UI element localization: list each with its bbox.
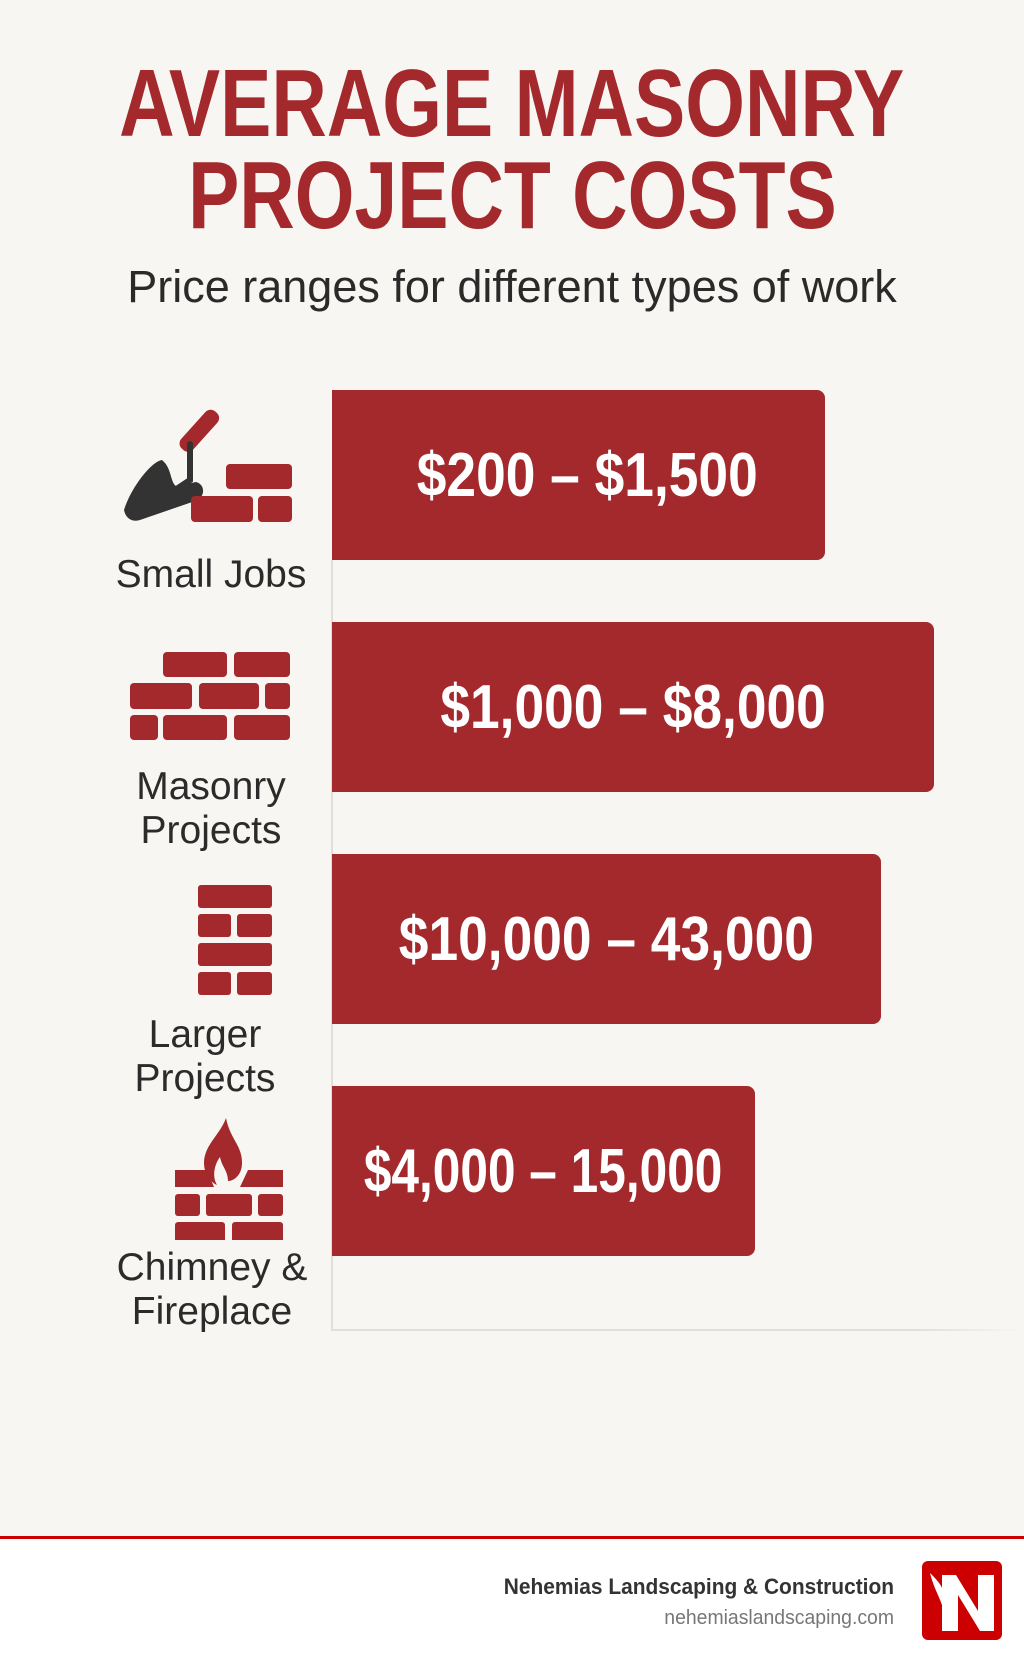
chart axes [331,560,333,1330]
label: larger projects: Larger [149,1013,261,1056]
bar: small jobs [332,390,825,560]
icon: brick column [198,885,272,995]
icon: fireplace [175,1118,283,1240]
bar: chimney & fireplace: $4,000 – 15,000 [364,1136,723,1206]
icon: brick wall [130,652,290,740]
label: larger projects [135,1013,275,1100]
label: chimney & fireplace: Fireplace [132,1290,292,1333]
bar: masonry projects [332,622,934,792]
bar: chimney & fireplace [332,1086,755,1256]
label: larger projects: Projects [135,1057,275,1100]
title [119,50,905,249]
footer [0,1536,1024,1669]
label: masonry projects: Masonry [136,765,286,808]
footer company text: Nehemias Landscaping & Construction [504,1574,894,1599]
label: masonry projects [136,765,286,852]
subtitle: Price ranges for different types of work [127,261,897,312]
label: chimney & fireplace [117,1246,307,1333]
label: chimney & fireplace: Chimney & [117,1246,307,1289]
bar: small jobs: $200 – $1,500 [417,440,758,510]
logo [922,1561,1002,1640]
footer company text [504,1574,894,1629]
bar: masonry projects: $1,000 – $8,000 [440,672,826,742]
label: masonry projects: Projects [141,809,281,852]
bar: larger projects: $10,000 – 43,000 [399,904,814,974]
footer company text: nehemiaslandscaping.com [664,1607,894,1629]
bar: larger projects [332,854,881,1024]
label: small jobs: Small Jobs [116,553,306,596]
title: AVERAGE MASONRY [119,50,905,157]
icon: trowel and bricks [124,410,292,522]
title: PROJECT COSTS [188,142,836,249]
